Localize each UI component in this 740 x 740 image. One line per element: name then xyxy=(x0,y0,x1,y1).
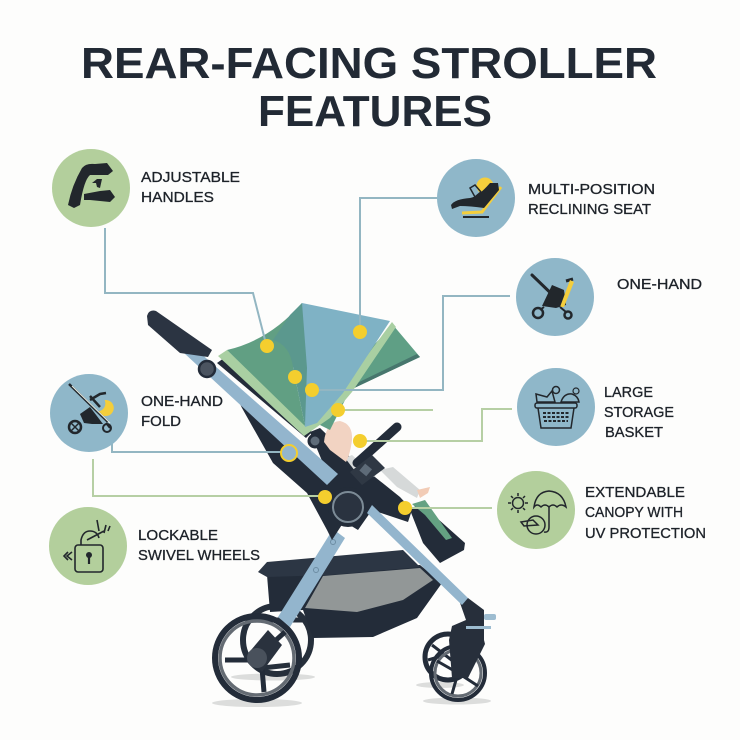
label: RECLINING SEAT xyxy=(528,202,651,218)
label: ONE-HAND xyxy=(141,394,223,410)
yellow markers xyxy=(260,325,412,515)
icon: padlock xyxy=(49,507,127,585)
label: LOCKABLE xyxy=(138,528,218,544)
feature: one-hand fold xyxy=(50,374,223,452)
feature: canopy xyxy=(497,471,706,549)
icon: reclining seat xyxy=(437,159,515,237)
icon: folding stroller xyxy=(50,374,128,452)
label xyxy=(604,385,674,441)
label xyxy=(585,485,706,542)
feature: swivel wheels xyxy=(49,507,260,585)
baby xyxy=(324,421,430,498)
label: UV PROTECTION xyxy=(585,526,706,542)
armrest xyxy=(309,427,397,485)
rear back wheel xyxy=(243,606,311,674)
title: FEATURES xyxy=(258,87,492,136)
label: LARGE xyxy=(604,385,653,401)
rear wheel xyxy=(215,616,299,700)
title: REAR-FACING STROLLER xyxy=(81,39,657,88)
handle xyxy=(147,311,215,377)
label: STORAGE xyxy=(604,405,674,421)
front fork xyxy=(449,598,496,678)
feature: one-hand xyxy=(516,258,702,336)
feature: storage basket xyxy=(517,368,674,446)
connector lines xyxy=(93,198,512,508)
front wheels xyxy=(425,634,485,700)
canopy xyxy=(218,303,420,436)
icon: sun and umbrella xyxy=(497,471,575,549)
label xyxy=(138,528,260,564)
stroller illustration xyxy=(147,303,496,707)
icon: handles xyxy=(52,149,130,227)
rear leg xyxy=(278,529,345,627)
label xyxy=(141,394,223,430)
label: ADJUSTABLE xyxy=(141,170,240,186)
label: MULTI-POSITION xyxy=(528,182,655,198)
footrest xyxy=(410,500,465,563)
title xyxy=(81,39,657,136)
storage basket xyxy=(258,550,442,638)
label: EXTENDABLE xyxy=(585,485,685,501)
label xyxy=(141,170,240,206)
seat body xyxy=(217,358,412,540)
label xyxy=(528,182,655,218)
label: FOLD xyxy=(141,414,181,430)
ground shadows xyxy=(212,674,491,707)
label: BASKET xyxy=(605,425,663,441)
icon: basket xyxy=(517,368,595,446)
feature: reclining seat xyxy=(437,159,655,237)
wheel hub xyxy=(328,487,368,527)
front leg xyxy=(367,505,468,605)
label: HANDLES xyxy=(141,190,214,206)
icon: stroller xyxy=(516,258,594,336)
label: ONE-HAND xyxy=(617,277,702,293)
label: SWIVEL WHEELS xyxy=(138,548,260,564)
label: CANOPY WITH xyxy=(585,505,683,521)
feature: adjustable handles xyxy=(52,149,240,227)
main frame bar xyxy=(184,344,338,485)
